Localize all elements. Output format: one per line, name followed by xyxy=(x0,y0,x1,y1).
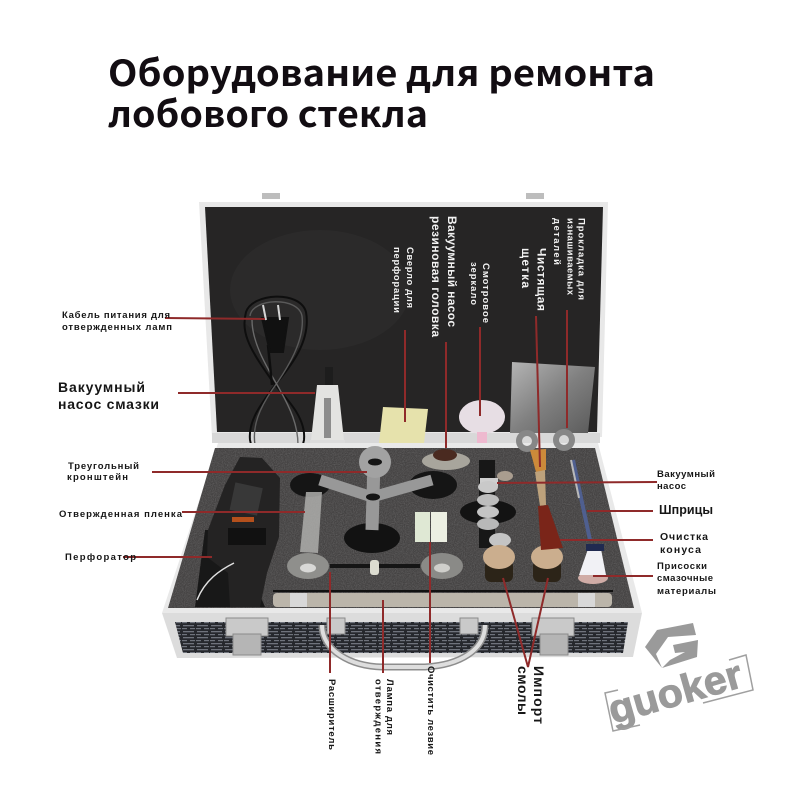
label: vacuum pump xyxy=(657,469,715,492)
pump rubber head xyxy=(422,449,470,470)
tool case photo xyxy=(162,193,642,667)
label: power cable: отвержденных ламп xyxy=(62,322,172,333)
inspection mirror xyxy=(459,400,505,455)
case base xyxy=(162,443,642,658)
label: syringes: Шприцы xyxy=(659,503,713,517)
label: cone cleaning: Очистка xyxy=(660,531,708,543)
blade packets xyxy=(415,512,447,542)
label: vacuum pump rubber head xyxy=(429,216,459,337)
label: vacuum pump: насос xyxy=(657,481,686,492)
label: suction cup lubricants: Присоски xyxy=(657,561,707,572)
resin bottles xyxy=(483,545,563,582)
label: clean blade: Очистить лезвие xyxy=(425,666,436,755)
suction cups and slider xyxy=(287,553,463,579)
label: suction cup lubricants xyxy=(657,561,716,597)
vacuum pump discs xyxy=(460,460,516,548)
label: cleaning brush xyxy=(519,248,548,311)
label: curing lamp: отверждения xyxy=(372,679,384,754)
triangular bracket xyxy=(290,446,457,553)
label: wear part gasket: изнашиваемых xyxy=(564,218,576,296)
label: suction cup lubricants: материалы xyxy=(657,586,716,597)
label: triangular bracket: Треугольный xyxy=(68,461,139,472)
label: power cable xyxy=(62,310,172,333)
lubricant cone xyxy=(578,544,608,584)
label: cured film: Отвержденная пленка xyxy=(59,509,183,520)
label: cone cleaning: конуса xyxy=(660,544,701,556)
label: triangular bracket xyxy=(67,461,139,483)
label: curing lamp xyxy=(372,679,395,754)
label: cleaning brush: щетка xyxy=(519,248,533,288)
logo brackets xyxy=(605,655,753,731)
label: lube vacuum pump xyxy=(58,379,159,412)
label: triangular bracket: кронштейн xyxy=(67,472,128,483)
label: wear part gasket xyxy=(551,218,586,300)
lubricant tube xyxy=(310,367,345,455)
case lid xyxy=(199,193,608,443)
washers xyxy=(519,432,572,449)
label: suction cup lubricants: смазочные xyxy=(657,573,713,584)
label: power cable: Кабель питания для xyxy=(62,310,170,321)
label: inspection mirror: зеркало xyxy=(468,262,479,305)
power cable xyxy=(244,297,307,464)
label: cone cleaning xyxy=(660,531,708,556)
watermark: guoker logo xyxy=(603,623,753,733)
drill bit card xyxy=(378,407,428,452)
label: curing lamp: Лампа для xyxy=(384,679,395,735)
logo wordmark: guoker xyxy=(603,653,747,733)
label: inspection mirror: Смотровое xyxy=(480,263,491,323)
cleaning brush xyxy=(530,449,563,550)
label: vacuum pump rubber head: Вакуумный насос xyxy=(445,216,459,327)
latches xyxy=(226,618,574,655)
label: imported resin xyxy=(515,666,547,724)
film holder xyxy=(300,492,322,553)
rotary drill xyxy=(195,457,280,607)
label: perforator: Перфоратор xyxy=(65,552,136,563)
parts bag xyxy=(510,362,595,433)
label: imported resin: смолы xyxy=(515,666,531,715)
case handle xyxy=(322,625,485,667)
label: vacuum pump: Вакуумный xyxy=(657,469,715,480)
label: vacuum pump rubber head: резиновая головка xyxy=(429,216,443,337)
curing lamp xyxy=(273,590,613,607)
title: Оборудование для ремонта xyxy=(108,45,655,97)
label: cleaning brush: Чистящая xyxy=(534,248,548,311)
label: wear part gasket: деталей xyxy=(551,218,562,265)
label: imported resin: Импорт xyxy=(531,666,547,724)
callout lines xyxy=(123,310,657,673)
title xyxy=(108,45,655,138)
label: perforation drill: Сверло для xyxy=(404,247,415,308)
syringe xyxy=(571,460,590,540)
label: lube vacuum pump: насос смазки xyxy=(58,396,159,412)
label: wear part gasket: Прокладка для xyxy=(576,218,586,300)
title: лобового стекла xyxy=(108,86,428,138)
icon: logo mark xyxy=(645,623,698,668)
label: perforation drill xyxy=(391,247,415,313)
label: expander: Расширитель xyxy=(326,679,337,750)
label: perforation drill: перфорации xyxy=(391,247,402,313)
label: lube vacuum pump: Вакуумный xyxy=(58,379,145,395)
label: inspection mirror xyxy=(468,262,491,323)
